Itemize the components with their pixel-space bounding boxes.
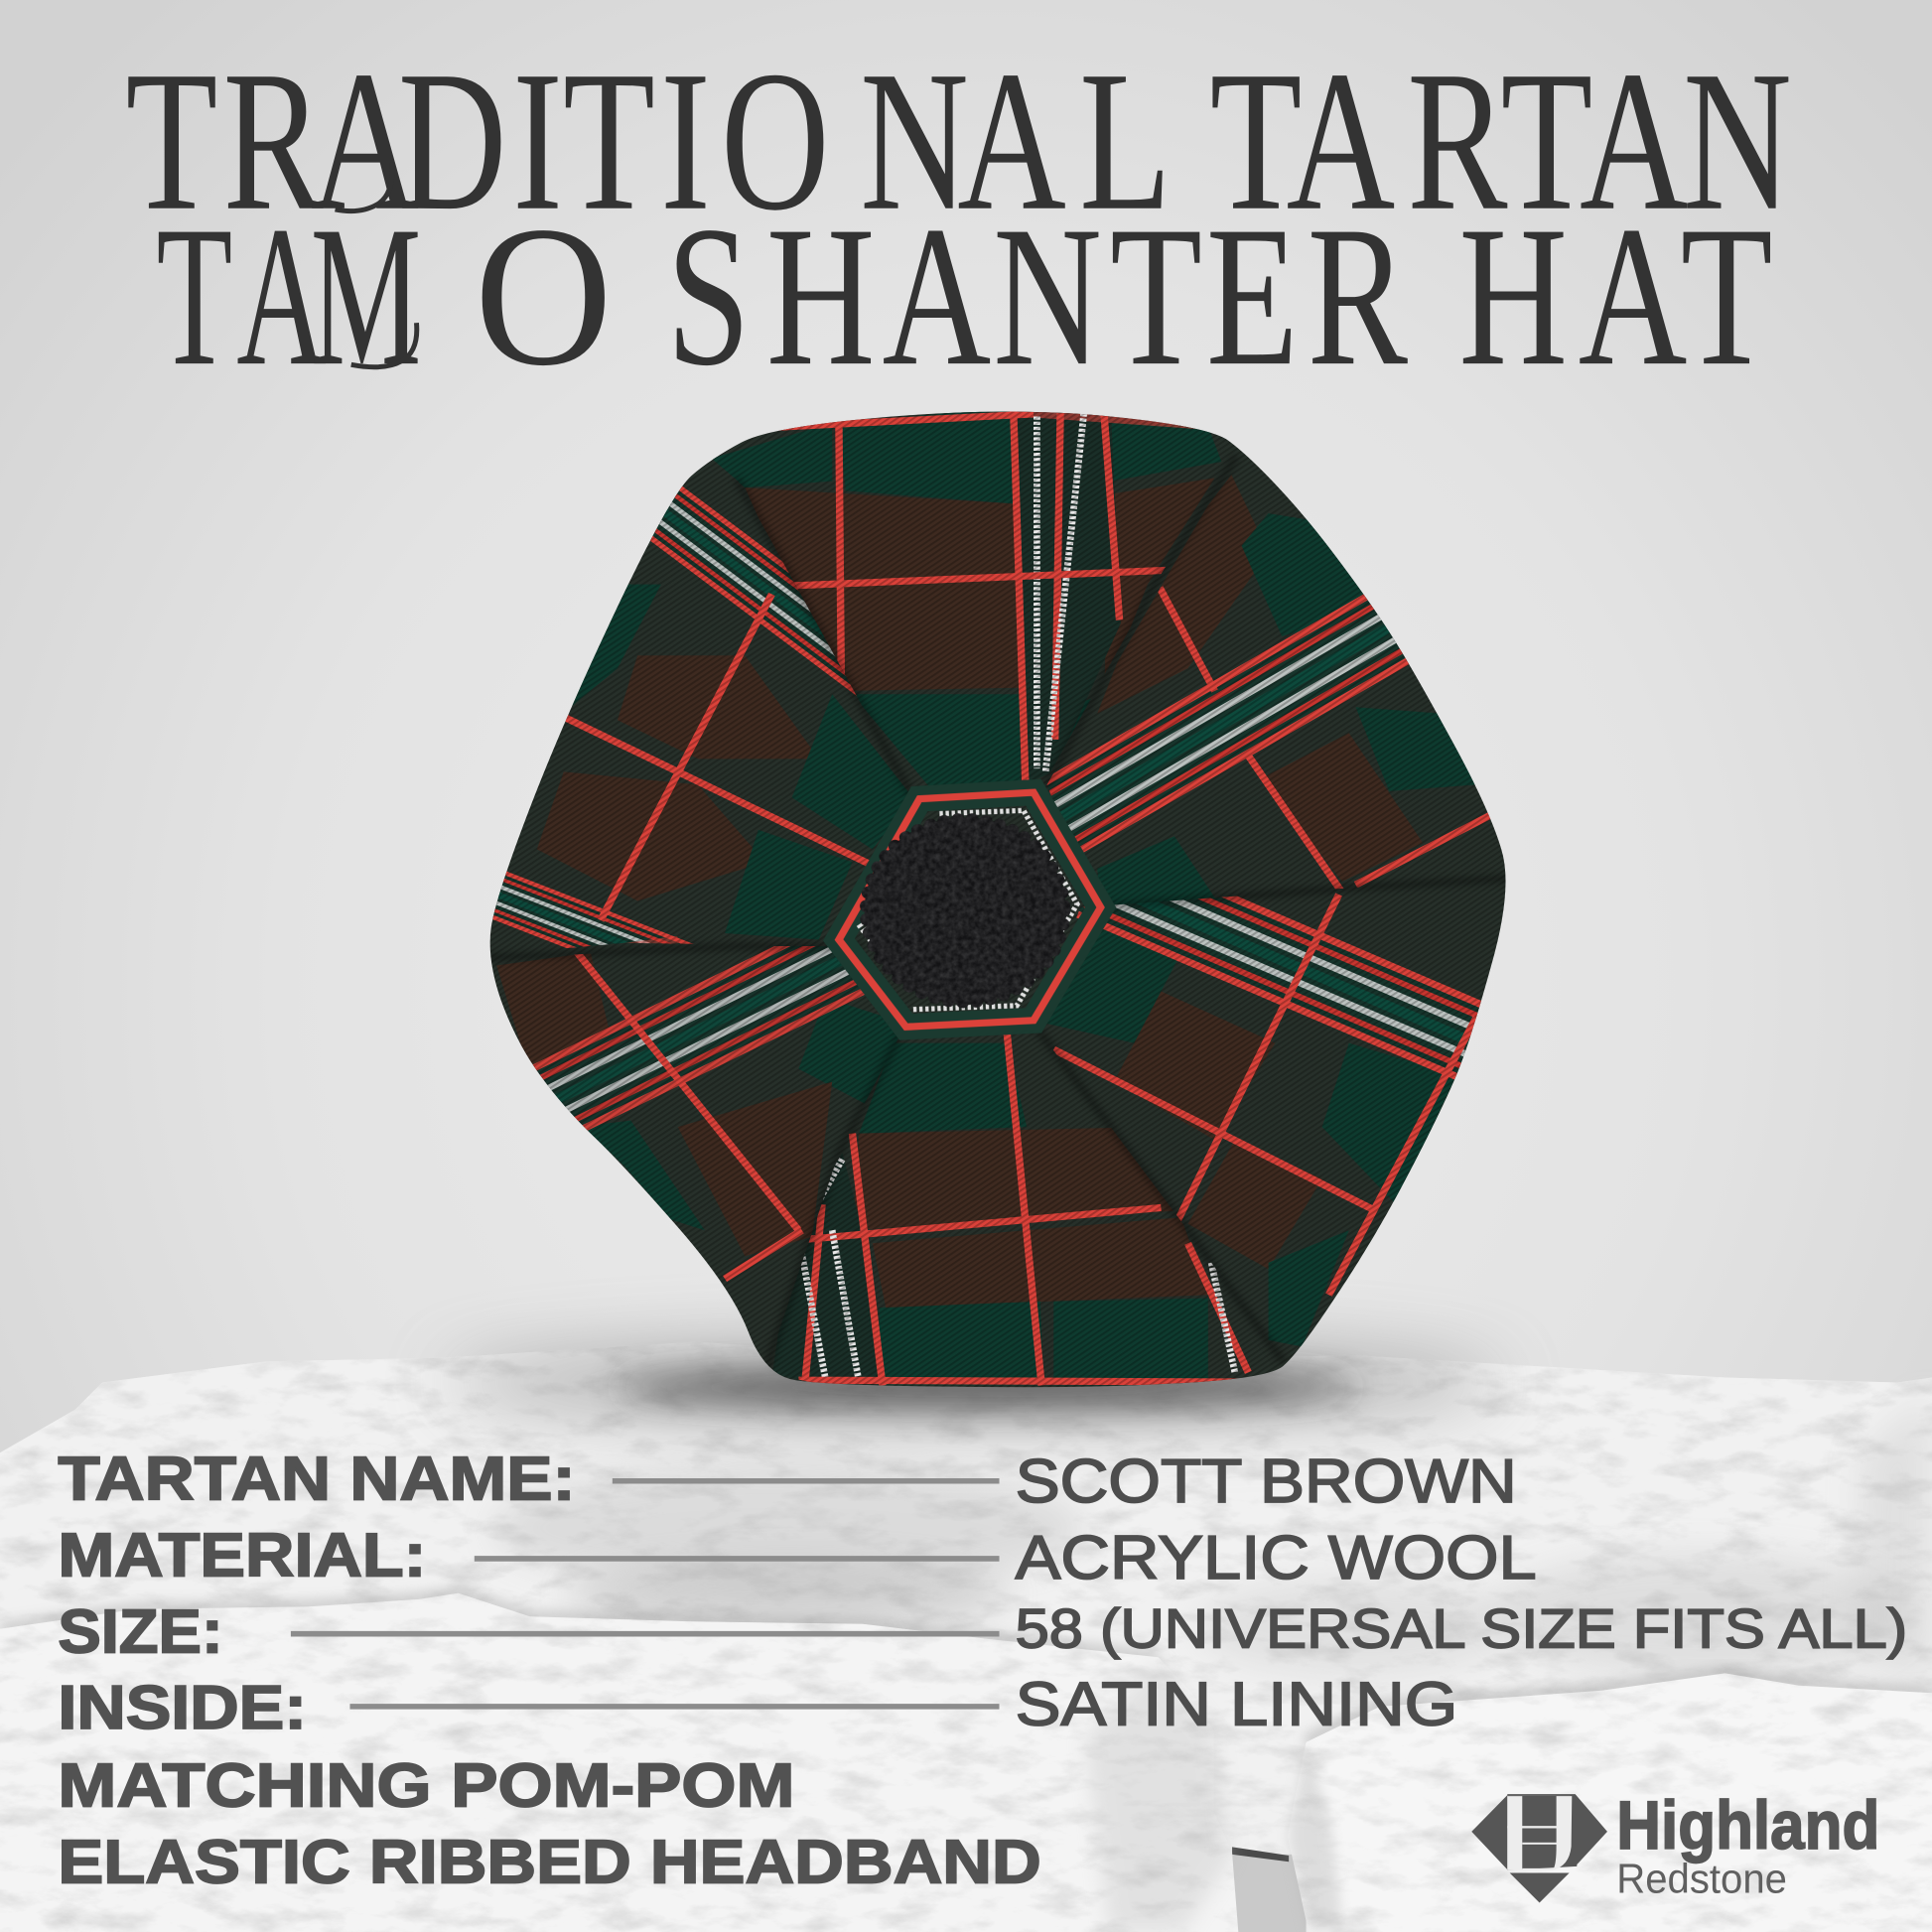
logo: Highland Redstone	[1471, 1788, 1879, 1902]
twill texture	[477, 397, 1529, 1410]
pom-pom	[865, 818, 1065, 1004]
title: O	[475, 185, 613, 407]
seam shading	[489, 459, 1510, 1372]
spec values: SATIN LINING	[1016, 1671, 1457, 1739]
gap between stones	[1213, 1855, 1307, 1932]
title: HAT	[1458, 185, 1773, 407]
stone plinth	[0, 1342, 1932, 1932]
tartan hat	[490, 411, 1505, 1388]
title: TRADITIONAL	[126, 30, 1172, 252]
spec labels: ELASTIC RIBBED HEADBAND	[58, 1828, 1041, 1896]
title	[126, 30, 1792, 408]
logo: Highland Redstone: Redstone	[1616, 1855, 1787, 1901]
spec labels: TARTAN NAME:	[58, 1445, 576, 1513]
spec values: 58 (UNIVERSAL SIZE FITS ALL)	[1016, 1596, 1907, 1659]
spec labels: SIZE:	[58, 1597, 223, 1666]
spec values: ACRYLIC WOOL	[1016, 1524, 1537, 1592]
spec labels	[58, 1445, 1041, 1896]
panel: upper left	[492, 486, 907, 949]
spec labels: INSIDE:	[58, 1674, 307, 1742]
icon: HJ diamond	[1471, 1794, 1607, 1902]
leader lines	[291, 1481, 1000, 1707]
spec labels: MATERIAL:	[58, 1521, 426, 1589]
title: TARTAN	[1210, 30, 1792, 252]
panel: lower left	[496, 946, 897, 1282]
panel: top	[712, 407, 1221, 791]
hat shadow	[444, 1343, 1503, 1422]
title: SHANTER	[666, 185, 1408, 407]
spec values	[1016, 1448, 1907, 1739]
spec values: SCOTT BROWN	[1016, 1448, 1517, 1516]
panel: bottom	[771, 1031, 1282, 1385]
panel: lower right	[1047, 893, 1481, 1346]
pom-pom ring	[839, 792, 1101, 1027]
logo: Highland Redstone: Highland	[1616, 1788, 1879, 1863]
panel: upper right	[1046, 475, 1491, 905]
spec labels: MATCHING POM-POM	[58, 1751, 794, 1820]
title: TAM	[157, 186, 421, 408]
